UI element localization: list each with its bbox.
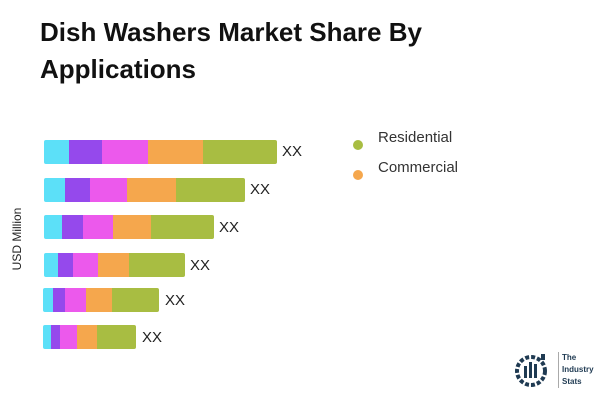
bar 3 (44, 215, 214, 239)
bar chart (43, 140, 302, 349)
value 5: XX (165, 292, 185, 309)
title: Applications (40, 54, 196, 84)
title (40, 17, 422, 84)
logo text: Stats (562, 377, 582, 386)
legend: commercial (353, 159, 458, 180)
value 3: XX (219, 219, 239, 236)
bar 6 (43, 325, 136, 349)
logo text (558, 352, 594, 388)
value 2: XX (250, 181, 270, 198)
bar 5 (43, 288, 159, 312)
legend: commercial: Commercial (378, 159, 458, 176)
bar 4 (44, 253, 185, 277)
logo text: The (562, 353, 576, 362)
value 4: XX (190, 257, 210, 274)
axis label: USD Million (10, 208, 24, 270)
bar 2 (44, 178, 245, 202)
logo (515, 352, 594, 388)
icon: gear (515, 354, 547, 387)
legend: residential: Residential (378, 129, 452, 146)
value 6: XX (142, 329, 162, 346)
value 1: XX (282, 143, 302, 160)
legend: residential (353, 129, 452, 150)
legend (353, 129, 458, 180)
title: Dish Washers Market Share By (40, 17, 422, 47)
logo text: Industry (562, 365, 594, 374)
bar 1 (44, 140, 277, 164)
